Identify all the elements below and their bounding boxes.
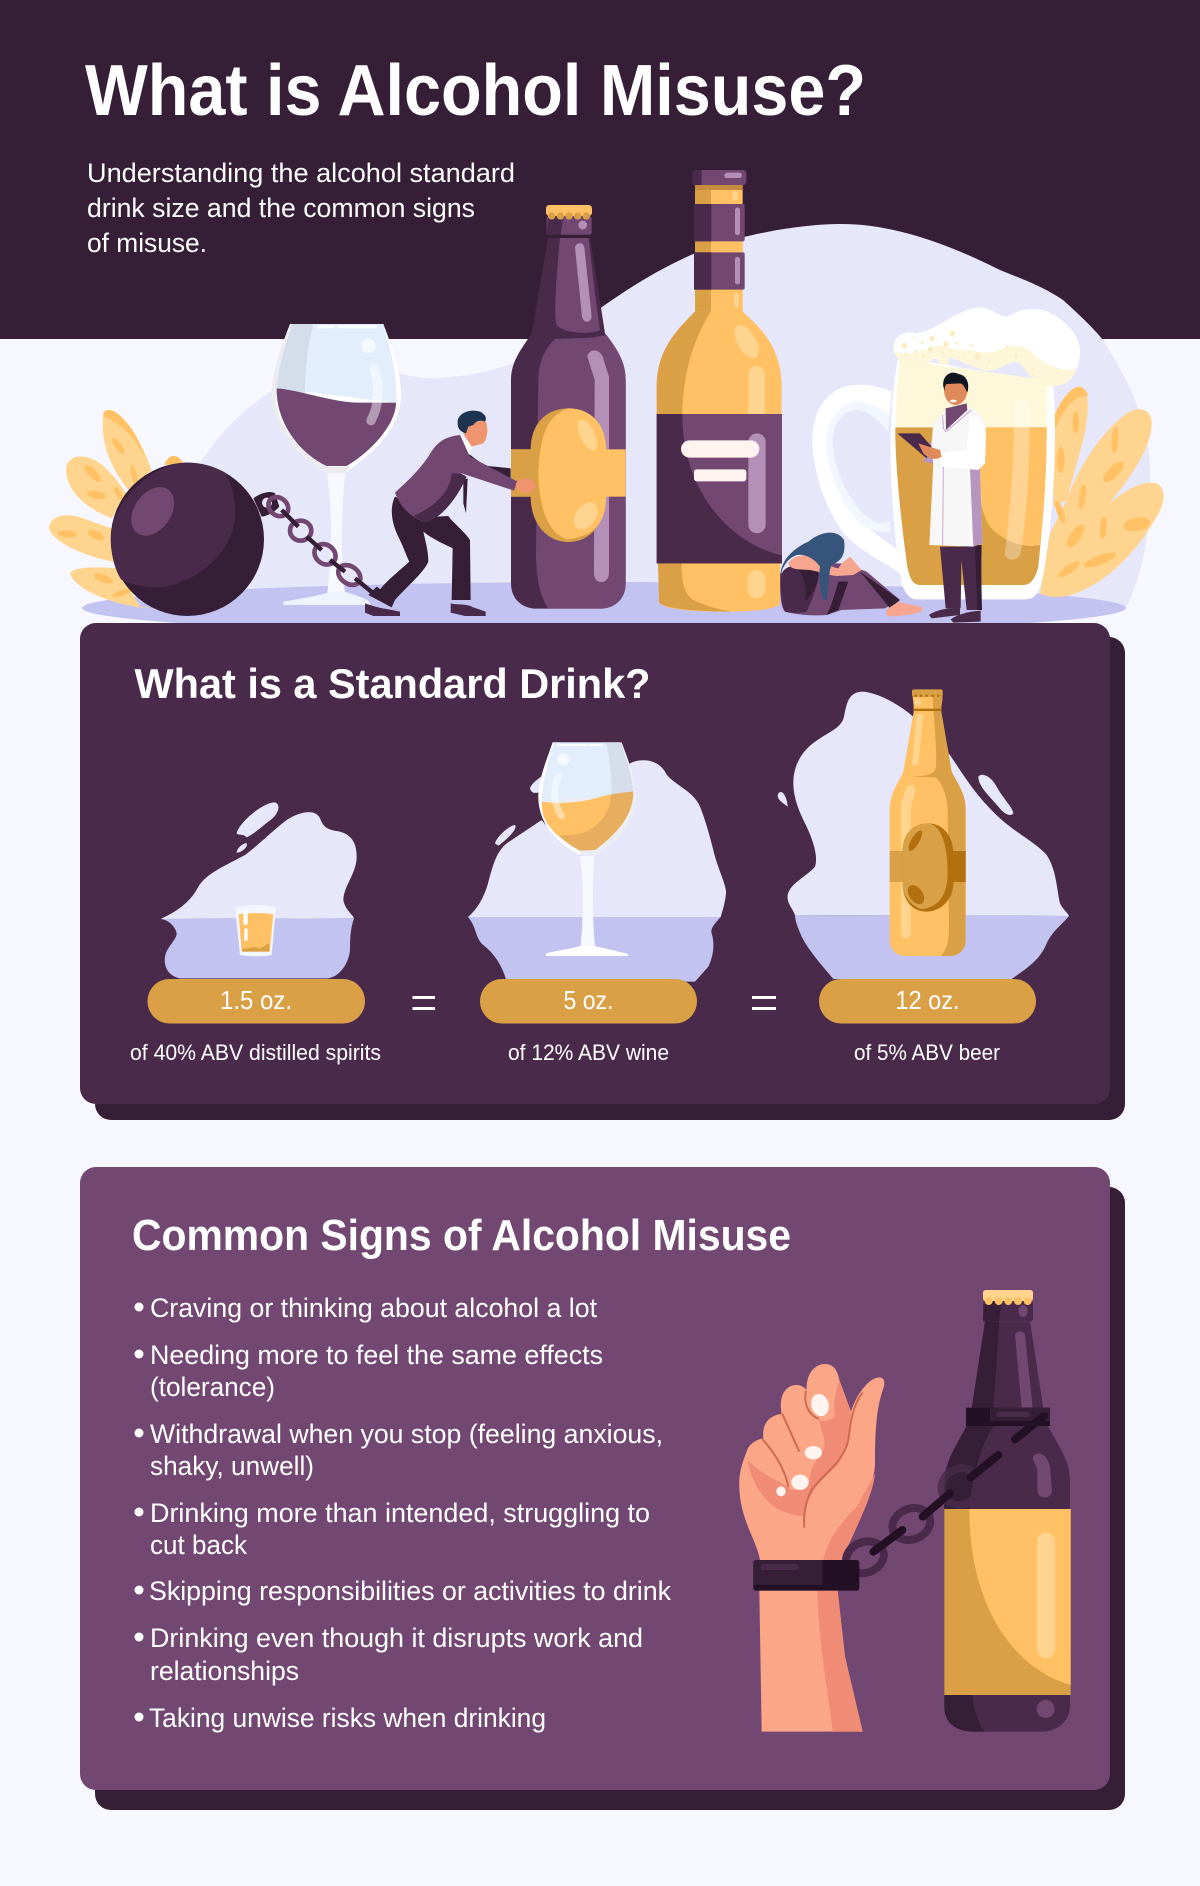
- sitting woman: [780, 533, 923, 617]
- wine glass: [538, 742, 636, 956]
- ground ellipse: [82, 582, 1126, 634]
- panel: what is a standard drink: [80, 623, 1125, 1120]
- right leaves: [1040, 387, 1164, 597]
- sign 3: Withdrawal when you stop (feeling anxious,: [150, 1419, 663, 1449]
- sign 5: Skipping responsibilities or activities to drink: [149, 1576, 671, 1606]
- measure: 1.5 oz: 1.5 oz.: [220, 985, 292, 1015]
- bottle: [944, 1290, 1071, 1732]
- equals sign: [412, 996, 435, 1010]
- caption: wine: of 12% ABV wine: [508, 1040, 669, 1065]
- right-side group: leaves, mug, woman, doctor: [780, 307, 1164, 623]
- man pushing bottle: [365, 411, 536, 616]
- doctor: [897, 373, 986, 623]
- cuff: [753, 1560, 859, 1591]
- wine blob: [468, 760, 726, 982]
- panel body: [80, 1167, 1110, 1790]
- measure: 12 oz: [819, 979, 1036, 1024]
- left leaves: [49, 410, 183, 608]
- header band: [0, 0, 1200, 339]
- sign 1: Craving or thinking about alcohol a lot: [150, 1293, 597, 1323]
- signs list: [134, 1293, 671, 1733]
- hero illustration: [49, 170, 1164, 634]
- sign 2: (tolerance): [150, 1372, 275, 1402]
- heading: Common Signs of Alcohol Misuse: [132, 1211, 791, 1260]
- subtitle: drink size and the common signs: [87, 193, 475, 223]
- sign 3: shaky, unwell): [150, 1451, 314, 1481]
- measure: 5 oz: 5 oz.: [564, 985, 614, 1015]
- sign 4: [134, 1498, 650, 1560]
- panel: common signs: [80, 1167, 1125, 1810]
- shot glass: [235, 905, 276, 956]
- sign 6: [134, 1623, 643, 1686]
- sign 4: cut back: [150, 1530, 247, 1560]
- caption: beer: of 5% ABV beer: [854, 1040, 1000, 1065]
- subtitle: [87, 158, 515, 258]
- ball and chain: [111, 463, 373, 616]
- sign 6: relationships: [150, 1656, 299, 1686]
- beer bottle: [890, 689, 966, 956]
- sign 2: [134, 1340, 603, 1402]
- large bottle: [657, 170, 782, 612]
- left leaves, ball, glass, chain: [49, 324, 401, 616]
- heading: What is a Standard Drink?: [134, 660, 650, 707]
- beer blob: [778, 692, 1069, 979]
- spirits illustration: [161, 802, 516, 978]
- sign 4: Drinking more than intended, struggling to: [150, 1498, 650, 1528]
- bottles: [511, 170, 782, 612]
- measure: 12 oz: 12 oz.: [896, 985, 960, 1015]
- background blob: [195, 224, 1150, 610]
- dark bottle: [511, 205, 626, 609]
- beer mug: [812, 307, 1080, 599]
- wine illustration: [468, 742, 726, 982]
- beer illustration: [778, 689, 1069, 979]
- sign 7: Taking unwise risks when drinking: [149, 1703, 546, 1733]
- measure: 5 oz: [480, 979, 697, 1024]
- panel shadow: [95, 637, 1125, 1120]
- spirits blob: [161, 802, 516, 978]
- sign 2: Needing more to feel the same effects: [150, 1340, 603, 1370]
- subtitle: Understanding the alcohol standard: [87, 158, 515, 188]
- illustration: hand chained to bottle: [739, 1290, 1071, 1732]
- panel body: [80, 623, 1110, 1104]
- measure: 1.5 oz: [148, 979, 365, 1024]
- chain: [841, 1416, 1044, 1579]
- hand: [739, 1364, 884, 1732]
- caption: spirits: of 40% ABV distilled spirits: [130, 1040, 381, 1065]
- sign 3: [134, 1419, 663, 1481]
- wine glass: [272, 324, 401, 605]
- title: What is Alcohol Misuse?: [85, 51, 866, 131]
- sign 6: Drinking even though it disrupts work and: [150, 1623, 643, 1653]
- subtitle: of misuse.: [87, 228, 207, 258]
- panel shadow: [95, 1187, 1125, 1810]
- equals sign: [752, 996, 776, 1010]
